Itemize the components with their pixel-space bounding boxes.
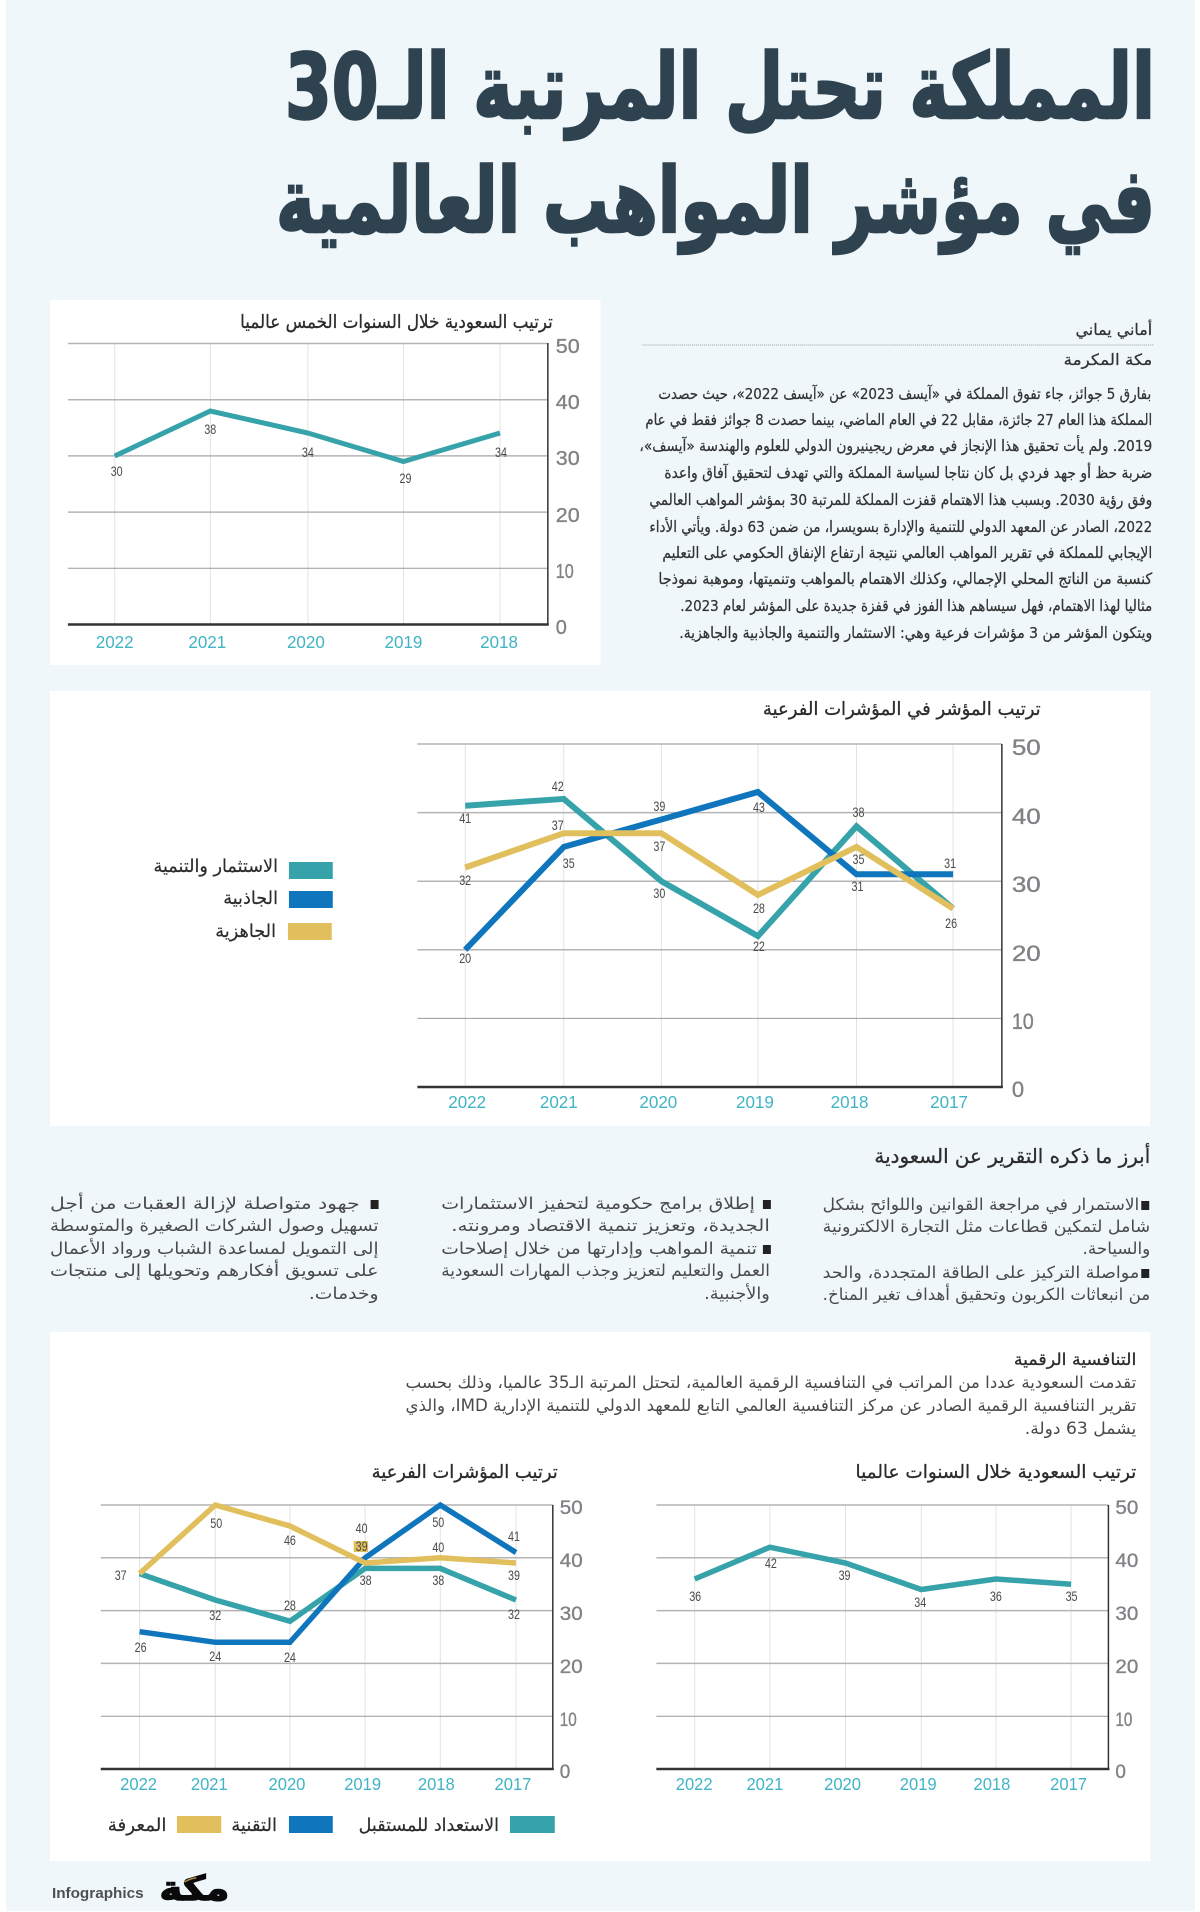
x axis years: 2019: [900, 1774, 937, 1794]
data labels: 29: [399, 471, 411, 486]
y axis labels: 10: [1012, 1009, 1034, 1034]
highlighted label background: [354, 1541, 368, 1552]
line: readiness: [465, 833, 953, 909]
x axis years: 2019: [736, 1092, 774, 1112]
x axis years: 2020: [639, 1092, 677, 1112]
data labels: 28: [284, 1598, 296, 1613]
panel paragraph: [405, 1373, 1137, 1439]
data labels: 37: [115, 1568, 127, 1583]
data labels: 43: [753, 800, 765, 815]
highlights column 3: إلى التمويل لمساعدة الشباب ورواد الأعمال: [50, 1238, 379, 1259]
line: Saudi ranking: [115, 411, 500, 462]
data labels: [111, 422, 507, 486]
y axis labels: 0: [556, 617, 567, 639]
panel: digital competitiveness: [50, 1332, 1150, 1861]
logo: مكة: [160, 1869, 229, 1908]
data labels: 38: [360, 1573, 372, 1588]
line: investment and development: [465, 799, 953, 936]
highlights column 1: من انبعاثات الكربون وتحقيق أهداف تغير المناخ.: [823, 1283, 1150, 1305]
chart heading: ترتيب المؤشر في المؤشرات الفرعية: [763, 699, 1041, 720]
data labels: 34: [914, 1595, 927, 1610]
data labels: 38: [204, 422, 216, 437]
x axis years: 2020: [269, 1774, 305, 1794]
data labels: 39: [839, 1568, 851, 1583]
y axis labels: 30: [556, 448, 580, 470]
data labels: 32: [459, 873, 471, 888]
y axis labels: 40: [1115, 1551, 1138, 1572]
article paragraph: كنسبة من الناتج المحلي الإجمالي، وكذلك الاهتمام بالمواهب وتنميتها، وموهبة نموذجا: [658, 570, 1153, 589]
x axis years: [120, 1774, 531, 1794]
data labels: 20: [459, 951, 471, 966]
data labels: 35: [853, 852, 864, 867]
data labels: 31: [944, 856, 956, 871]
highlights column 1: [823, 1195, 1150, 1305]
x axis years: 2017: [1050, 1774, 1087, 1794]
chart: Saudi ranking over the years: [656, 1462, 1138, 1794]
y axis labels: 20: [560, 1657, 583, 1678]
credit label: Infographics: [52, 1885, 144, 1902]
data labels: 46: [284, 1533, 296, 1548]
highlights column 3: على تسويق أفكارهم وتحويلها إلى منتجات: [50, 1259, 379, 1281]
y axis labels: 10: [1115, 1710, 1132, 1731]
x axis years: 2017: [930, 1092, 968, 1112]
legend: الاستعداد للمستقبل: [359, 1815, 499, 1836]
chart heading: ترتيب السعودية خلال السنوات عالميا: [856, 1462, 1136, 1483]
y axis labels: 50: [1012, 735, 1041, 760]
article paragraph: الإيجابي للمملكة في تقرير المواهب العالمي نتيجة ارتفاع الإنفاق الحكومي على التعليم: [662, 544, 1152, 563]
highlights column 2: إطلاق برامج حكومية لتحفيز الاستثمارات: [441, 1194, 755, 1214]
data labels: 36: [990, 1589, 1002, 1604]
y axis labels: 40: [1012, 804, 1041, 829]
data labels: 41: [459, 811, 471, 826]
highlights column 1: الاستمرار في مراجعة القوانين واللوائح بشكل: [823, 1195, 1139, 1215]
y axis labels: 0: [1115, 1762, 1126, 1783]
y axis labels: 20: [556, 505, 580, 527]
legend: الاستثمار والتنمية: [154, 856, 278, 877]
data labels: 31: [852, 879, 863, 894]
y axis labels: [1012, 735, 1041, 1102]
data labels: 34: [495, 445, 507, 460]
y axis labels: 20: [1012, 941, 1041, 966]
author name: أماني يماني: [1076, 319, 1152, 340]
data labels: 30: [111, 464, 123, 479]
x axis years: 2019: [385, 632, 422, 652]
highlights column 2: الجديدة، وتعزيز تنمية الاقتصاد ومرونته.: [451, 1216, 770, 1236]
y axis labels: [560, 1498, 583, 1783]
y axis labels: 30: [1012, 872, 1041, 897]
line: future readiness: [140, 1568, 516, 1621]
y axis labels: 50: [1115, 1498, 1138, 1519]
data labels: 36: [689, 1589, 701, 1604]
x axis years: 2020: [824, 1774, 861, 1794]
line: appeal: [465, 792, 953, 950]
panel: sub-index ranking chart: [50, 691, 1150, 1126]
data labels: 39: [653, 799, 665, 814]
x axis years: 2022: [120, 1774, 157, 1794]
data labels: 32: [508, 1607, 520, 1622]
highlights column 3: وخدمات.: [309, 1284, 379, 1304]
data labels: 38: [853, 805, 864, 820]
x axis years: 2018: [480, 632, 518, 652]
line: technology: [140, 1505, 516, 1642]
data labels: 35: [563, 856, 575, 871]
panel: five-year ranking chart: [50, 300, 601, 665]
panel heading: التنافسية الرقمية: [1014, 1350, 1136, 1370]
data labels: 37: [653, 839, 665, 854]
panel paragraph: تقدمت السعودية عددا من المراتب في التنافسية الرقمية العالمية، لتحتل المرتبة الـ35 عالميا، وذلك بحسب: [405, 1373, 1137, 1393]
highlights column 2: تنمية المواهب وإدارتها من خلال إصلاحات: [441, 1239, 757, 1259]
data labels: 32: [209, 1608, 221, 1623]
page content: [50, 300, 1153, 1908]
x axis years: 2021: [188, 632, 226, 652]
footer: credit and logo: [52, 1869, 229, 1908]
y axis labels: 20: [1115, 1657, 1138, 1678]
highlights column 3: تسهيل وصول الشركات الصغيرة والمتوسطة: [50, 1216, 379, 1236]
x axis years: 2021: [540, 1092, 578, 1112]
data labels: 35: [1066, 1589, 1078, 1604]
y axis labels: 40: [556, 392, 580, 414]
data labels: 34: [302, 445, 314, 460]
data labels: 28: [753, 901, 765, 916]
data labels: 22: [753, 939, 765, 954]
x axis years: 2022: [448, 1092, 486, 1112]
highlights column 2: العمل والتعليم لتعزيز وجذب المهارات السعودية: [441, 1261, 770, 1281]
legend: [108, 1815, 555, 1836]
x axis years: 2017: [495, 1774, 531, 1794]
data labels: 24: [284, 1650, 296, 1665]
y axis labels: [1115, 1498, 1138, 1783]
chart heading: ترتيب المؤشرات الفرعية: [372, 1462, 558, 1483]
highlights column 1: مواصلة التركيز على الطاقة المتجددة، والحد: [823, 1263, 1139, 1283]
x axis years: 2020: [287, 632, 325, 652]
x axis years: [676, 1774, 1087, 1794]
x axis years: 2019: [344, 1774, 381, 1794]
data labels: 30: [653, 886, 665, 901]
y axis labels: [556, 336, 580, 639]
y axis labels: 0: [560, 1762, 570, 1783]
x axis years: 2018: [973, 1774, 1010, 1794]
data labels: 42: [552, 779, 564, 794]
location: مكة المكرمة: [1064, 351, 1152, 369]
legend: التقنية: [231, 1815, 277, 1836]
data labels: [459, 779, 957, 966]
panel paragraph: يشمل 63 دولة.: [1025, 1419, 1137, 1439]
y axis labels: 30: [560, 1604, 583, 1625]
data labels: [689, 1556, 1078, 1610]
y axis labels: 10: [556, 561, 574, 583]
y axis labels: 40: [560, 1551, 583, 1572]
legend: الجاهزية: [215, 921, 276, 942]
x axis years: 2022: [96, 632, 134, 652]
line: Saudi ranking: [695, 1547, 1071, 1590]
x axis years: 2021: [746, 1774, 783, 1794]
x axis years: 2018: [418, 1774, 455, 1794]
article paragraph: ويتكون المؤشر من 3 مؤشرات فرعية وهي: الاستثمار والتنمية والجاذبية والجاهزية.: [679, 624, 1152, 643]
x axis years: [448, 1092, 968, 1112]
article paragraph: وفق رؤية 2030. وبسبب هذا الاهتمام قفزت المملكة للمرتبة 30 بمؤشر المواهب العالمي: [649, 491, 1152, 510]
data labels: 38: [432, 1573, 444, 1588]
article paragraph: ضربة حظ أو جهد فردي بل كان نتاجا لسياسة المملكة والتي تهدف لتحقيق آفاق واعدة: [664, 462, 1152, 483]
data labels: 40: [432, 1540, 444, 1555]
highlights column 1: شامل لتمكين قطاعات مثل التجارة الالكترونية: [823, 1217, 1150, 1237]
article paragraph: بفارق 5 جوائز، جاء تفوق المملكة في «آيسف 2023» عن «آيسف 2022»، حيث حصدت: [658, 384, 1151, 404]
article paragraph: 2022، الصادر عن المعهد الدولي للتنمية والإدارة بسويسرا، من ضمن 63 دولة. ويأتي الأداء: [649, 516, 1152, 537]
highlights column 2: [441, 1194, 771, 1304]
legend: الجاذبية: [223, 888, 278, 909]
data labels: 24: [209, 1649, 222, 1664]
section heading: أبرز ما ذكره التقرير عن السعودية: [874, 1143, 1150, 1168]
y axis labels: 10: [560, 1710, 577, 1731]
data labels: 26: [135, 1640, 147, 1655]
article paragraph: [639, 384, 1153, 643]
x axis years: 2018: [831, 1092, 868, 1112]
line: knowledge: [140, 1505, 516, 1574]
section: report highlights: [50, 1143, 1150, 1305]
data labels: 39: [356, 1539, 368, 1554]
data labels: 39: [508, 1568, 520, 1583]
chart heading: ترتيب السعودية خلال السنوات الخمس عالميا: [240, 312, 553, 333]
data labels: 42: [765, 1556, 777, 1571]
article paragraph: 2019. ولم يأت تحقيق هذا الإنجاز في معرض ريجينيرون الدولي للعلوم والهندسة «آيسف»،: [639, 435, 1152, 456]
data labels: 37: [552, 818, 564, 833]
legend: المعرفة: [108, 1815, 166, 1836]
title: [276, 35, 1155, 254]
highlights column 3: [50, 1192, 379, 1304]
article paragraph: المملكة هذا العام 27 جائزة، مقابل 22 في العام الماضي، بينما حصدت 8 جوائز فقط في عام: [645, 411, 1152, 430]
highlights column 2: والأجنبية.: [704, 1283, 770, 1304]
data labels: 41: [508, 1529, 520, 1544]
highlights column 1: والسياحة.: [1083, 1239, 1150, 1259]
y axis labels: 50: [560, 1498, 583, 1519]
chart: digital sub-indicators: [101, 1462, 583, 1836]
data labels: 26: [945, 916, 957, 931]
x axis years: 2021: [191, 1774, 228, 1794]
data labels: 50: [210, 1516, 222, 1531]
y axis labels: 0: [1012, 1077, 1024, 1102]
legend: [154, 856, 333, 942]
data labels: 50: [432, 1515, 444, 1530]
panel paragraph: تقرير التنافسية الرقمية الصادر عن مركز التنافسية العالمي التابع للمعهد الدولي للتنمية الإدارية IMD، والذي: [405, 1396, 1137, 1416]
data labels: 40: [356, 1521, 368, 1536]
data labels: [115, 1515, 520, 1665]
highlights column 3: جهود متواصلة لإزالة العقبات من أجل: [50, 1192, 360, 1214]
x axis years: 2022: [676, 1774, 713, 1794]
y axis labels: 30: [1115, 1604, 1138, 1625]
byline and article text: [639, 319, 1153, 643]
y axis labels: 50: [556, 336, 580, 358]
x axis years: [96, 632, 518, 652]
